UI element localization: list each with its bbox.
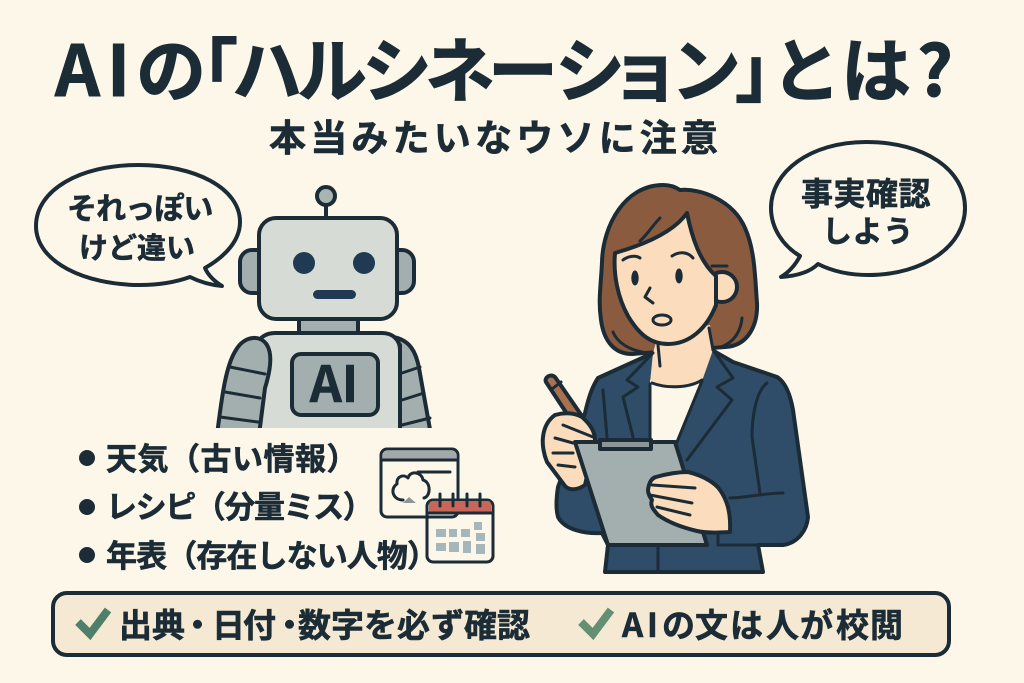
shirt and neck bbox=[650, 325, 713, 442]
head bbox=[259, 218, 397, 319]
title: AIの「ハルシネーション」とは? bbox=[54, 16, 953, 117]
speech bubble: woman: 事実確認 bbox=[801, 169, 931, 215]
jacket bbox=[556, 350, 808, 572]
icon: calendar bbox=[427, 494, 493, 562]
left arm bbox=[217, 338, 270, 435]
right arm bbox=[393, 337, 431, 435]
speech bubble: robot: けど違い bbox=[79, 225, 195, 267]
nose bbox=[645, 288, 653, 303]
speech bubble: woman: しよう bbox=[822, 207, 914, 251]
pencil bbox=[546, 376, 582, 423]
finger lines bbox=[553, 425, 593, 467]
bullets bbox=[79, 450, 95, 563]
item recipe: レシピ（分量ミス） bbox=[106, 482, 372, 527]
check icon 1 bbox=[78, 610, 108, 634]
eyes bbox=[631, 268, 683, 286]
speech bubble: robot: それっぽい bbox=[67, 184, 212, 228]
eyes bbox=[293, 252, 375, 274]
list: hallucination examples bbox=[79, 434, 437, 576]
ears bbox=[240, 250, 414, 293]
ear bbox=[707, 272, 737, 302]
mouth bbox=[313, 290, 356, 299]
hand holding pencil bbox=[543, 413, 595, 489]
hand on clipboard bbox=[648, 472, 730, 533]
check icon 2 bbox=[581, 610, 611, 634]
item weather: 天気（古い情報） bbox=[106, 434, 358, 479]
neck bbox=[297, 321, 360, 331]
antenna bbox=[317, 187, 335, 218]
icon: weather page bbox=[381, 449, 458, 517]
speech bubble: robot bbox=[36, 165, 240, 286]
speech bubble: woman bbox=[771, 142, 965, 277]
face bbox=[615, 213, 716, 344]
arm stripes bbox=[220, 367, 430, 425]
robot illustration bbox=[217, 187, 431, 435]
body bbox=[258, 333, 400, 435]
hair bbox=[600, 185, 757, 354]
item chronology: 年表（存在しない人物） bbox=[106, 531, 437, 576]
bottom checklist bar bbox=[53, 593, 949, 655]
hand finger lines bbox=[650, 485, 695, 515]
hair strands bbox=[613, 218, 742, 353]
mouth bbox=[653, 315, 671, 325]
jacket lapels and folds bbox=[603, 350, 783, 572]
check text 2: AIの文は人が校閲 bbox=[621, 599, 903, 647]
subtitle: 本当みたいなウソに注意 bbox=[269, 108, 722, 162]
brows bbox=[623, 253, 693, 260]
AI chest panel bbox=[292, 345, 378, 417]
AI chest panel: AI bbox=[309, 345, 358, 417]
woman illustration bbox=[543, 185, 808, 572]
check text 1: 出典・日付・数字を必ず確認 bbox=[119, 599, 530, 647]
clipboard bbox=[575, 440, 707, 545]
